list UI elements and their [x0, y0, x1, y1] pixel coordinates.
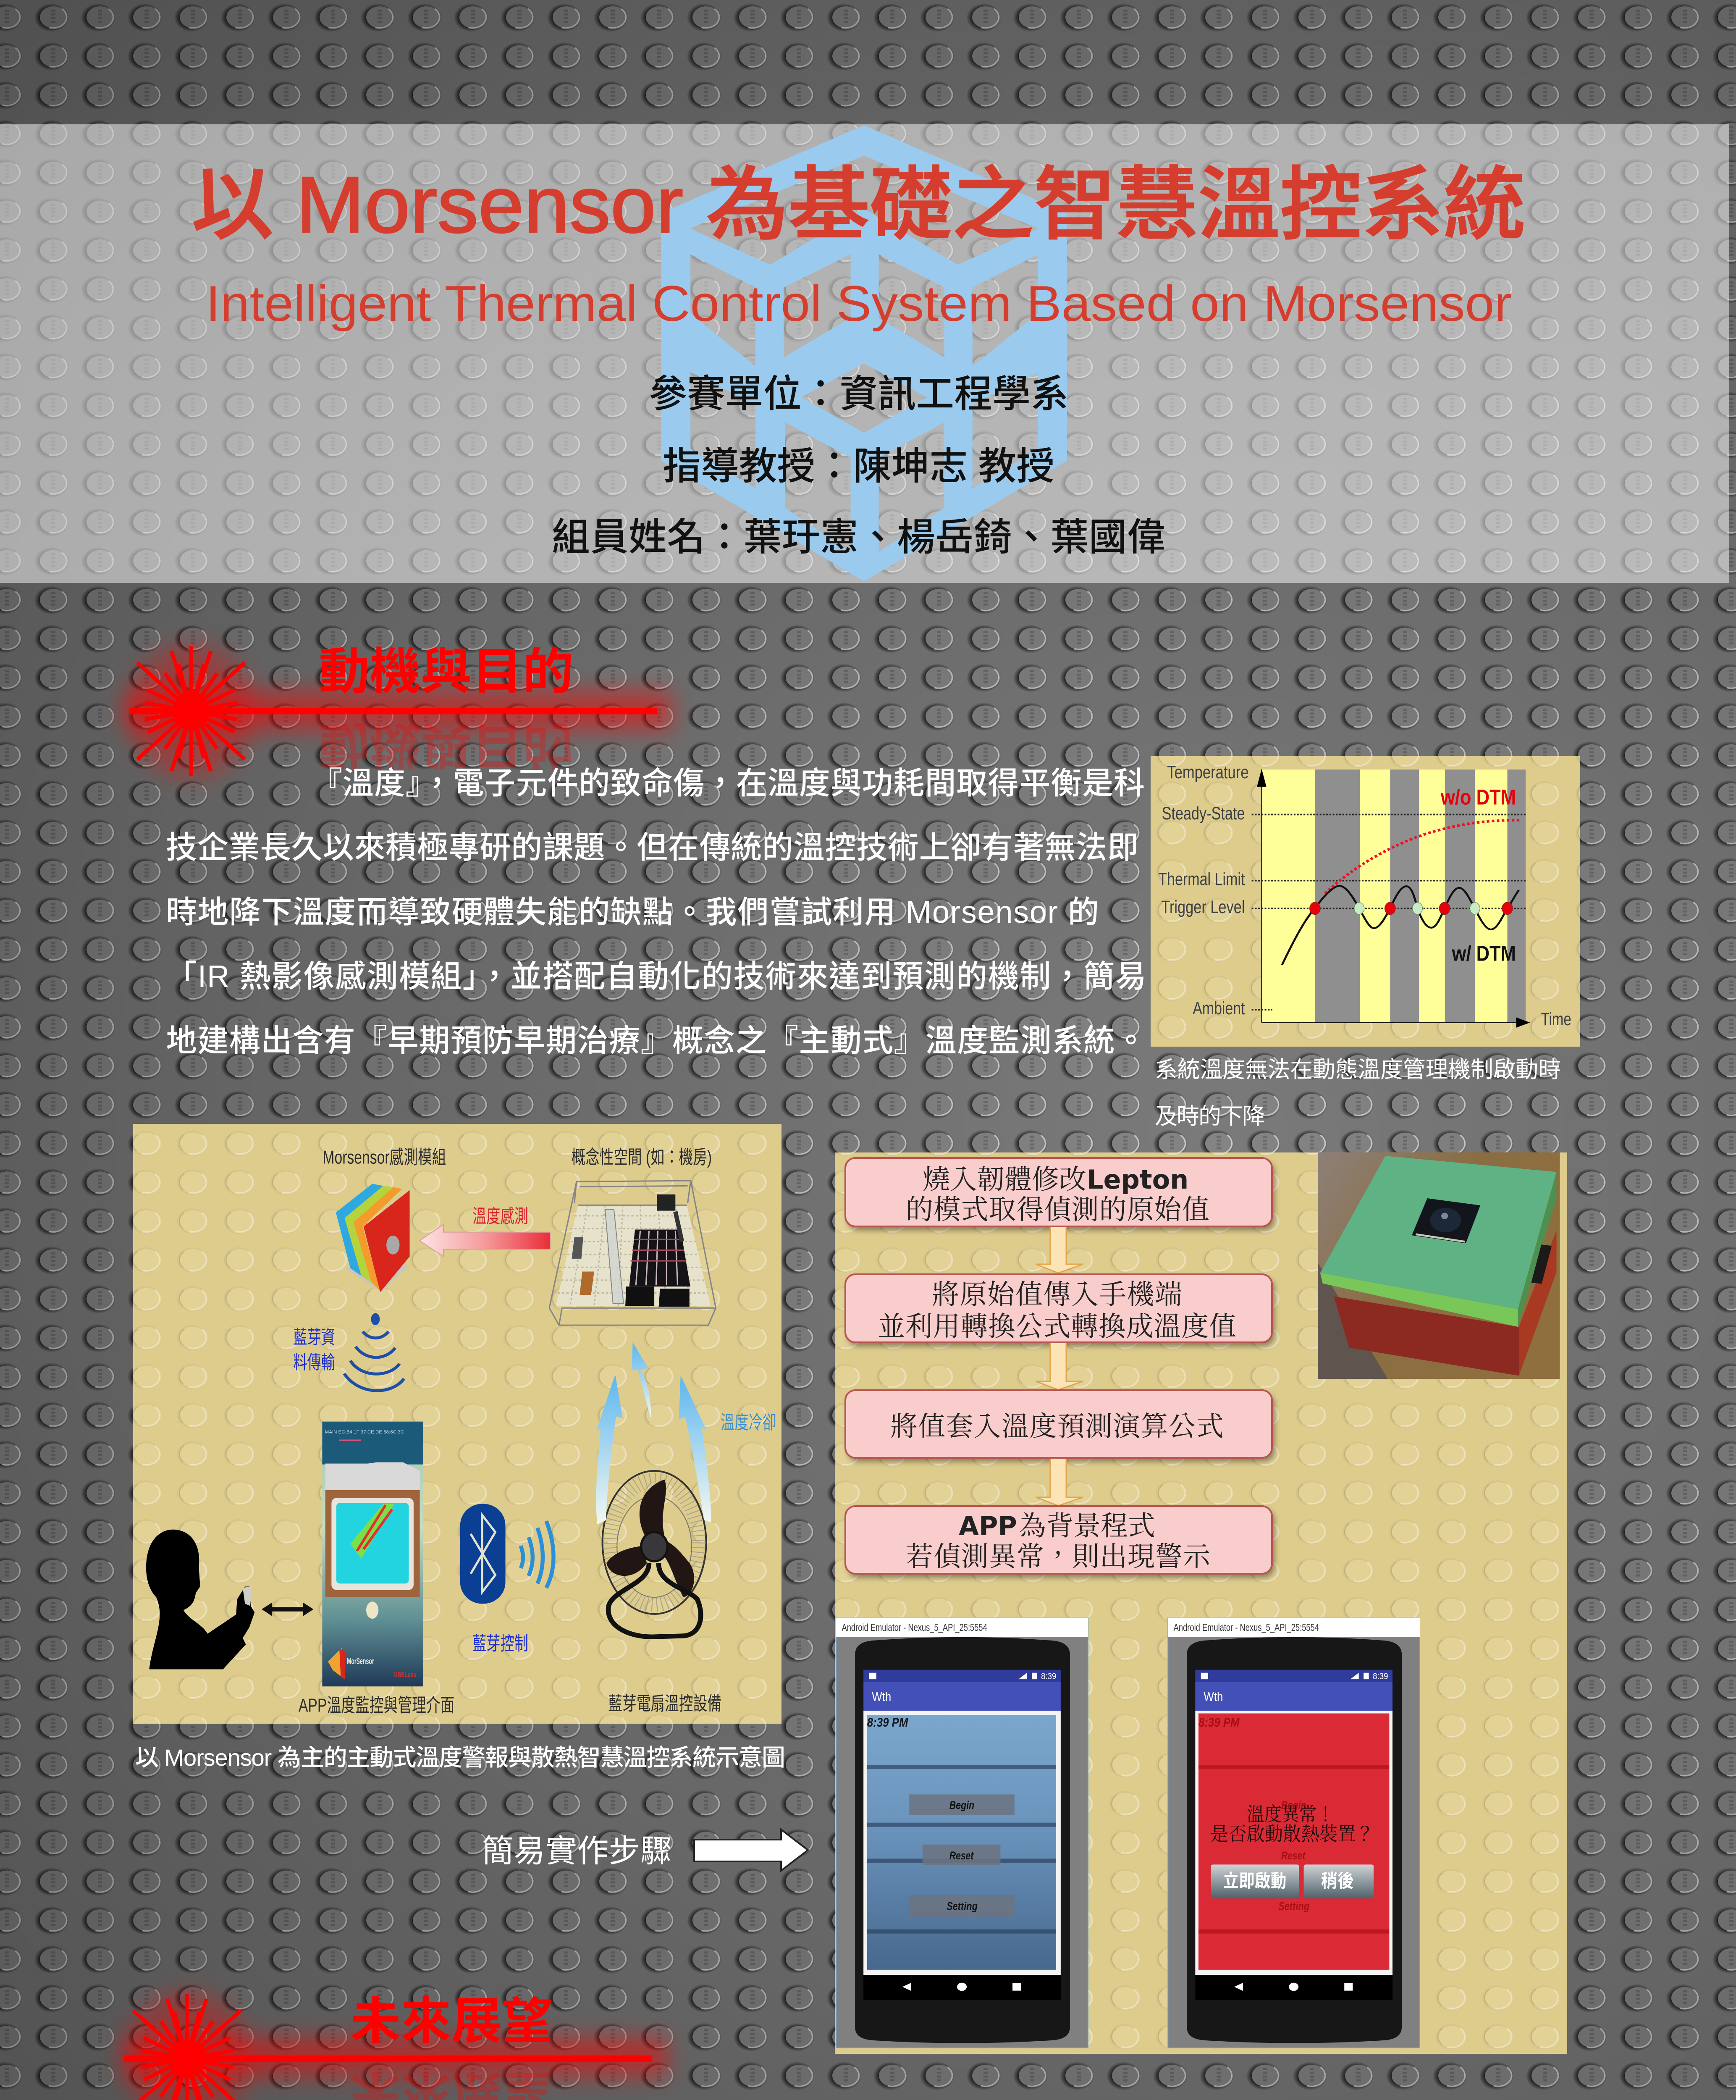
subtitle: Intelligent Thermal Control System Based on Morsensor: [206, 276, 1512, 332]
panel: system concept diagram: 概念性空間 (如：機房): [571, 1147, 712, 1168]
flow arrows: [1036, 1226, 1083, 1506]
app screen: MAIN EC:B4:1F 37:CE:DE 58:6C:3C: [325, 1430, 404, 1435]
panel: DTM temperature chart: Trigger Level: [1161, 897, 1245, 917]
text: advisor: 指導教授：陳坤志 教授: [663, 445, 1054, 488]
photo: sensor box: [1318, 1152, 1560, 1379]
phone: normal state: 8:39 PM: [867, 1716, 908, 1730]
phone: alert state: Begin: [1281, 1799, 1306, 1811]
caption: diagram: 以 Morsensor 為主的主動式溫度警報與散熱智慧溫控系統示意圖: [135, 1744, 785, 1771]
flow step 3: [845, 1390, 1272, 1458]
app screen: MorSensor: [347, 1656, 374, 1666]
phone: alert state: 8:39 PM: [1198, 1716, 1240, 1730]
arrow: person to app: [262, 1602, 313, 1616]
text: department: 參賽單位：資訊工程學系: [649, 373, 1069, 415]
panel: DTM temperature chart: [1151, 756, 1580, 1047]
section header: future outlook: 未來展望: [350, 1994, 553, 2049]
text: team members: 組員姓名：葉玗憲、楊岳錡、葉國偉: [552, 516, 1165, 559]
flow step 4: APP: [959, 1511, 1017, 1541]
flow step 2: 並利用轉換公式轉換成溫度值: [878, 1312, 1236, 1342]
panel: DTM temperature chart: Temperature: [1167, 762, 1249, 782]
text block: motivation body: 地建構出含有『早期預防早期治療』概念之『主動式』溫度監測系統。: [166, 1023, 1146, 1058]
flow step 4: 若偵測異常，則出現警示: [906, 1542, 1211, 1572]
app screen: [322, 1422, 423, 1686]
panel: system concept diagram: 料傳輸: [293, 1352, 335, 1373]
icon: Morsensor cube logo: [661, 125, 1067, 581]
panel: DTM temperature chart: Thermal Limit: [1158, 869, 1245, 889]
arrow: temperature sensing: [420, 1224, 550, 1257]
text block: motivation body: 「IR 熱影像感測模組」，並搭配自動化的技術來達到預測的機制，簡易: [166, 959, 1146, 994]
panel: system concept diagram: 藍芽電扇溫控設備: [608, 1693, 721, 1714]
icon: bluetooth: [460, 1504, 553, 1604]
icon: fan: [603, 1471, 706, 1637]
panel: DTM temperature chart: Steady-State: [1162, 803, 1245, 823]
panel: DTM temperature chart: Time: [1541, 1009, 1571, 1029]
phone: alert state: [1168, 1618, 1420, 2048]
text block: motivation body: 技企業長久以來積極專研的課題。但在傳統的溫控技術上卻有著無法即: [166, 830, 1138, 865]
icon: Morsensor module: [336, 1184, 410, 1292]
phone: normal state: Setting: [947, 1900, 978, 1912]
section header: future outlook: [124, 1992, 668, 2100]
caption: chart: [1155, 1057, 1561, 1129]
panel: DTM temperature chart: w/o DTM: [1440, 785, 1516, 809]
text block: motivation body: 『溫度』，電子元件的致命傷，在溫度與功耗間取得平衡是科: [311, 766, 1145, 801]
phone: alert state: 是否啟動散熱裝置？: [1210, 1824, 1374, 1845]
flow step 1: Lepton: [1087, 1164, 1188, 1195]
title: 以 Morsensor 為基礎之智慧溫控系統: [191, 160, 1526, 249]
text block: motivation body: [166, 766, 1146, 1058]
phone: normal state: [836, 1618, 1088, 2048]
arrow: to steps panel: [694, 1830, 808, 1871]
section header: motivation and purpose: [126, 644, 672, 778]
text block: motivation body: 時地降下溫度而導致硬體失能的缺點。我們嘗試利用 Morsensor 的: [166, 895, 1099, 929]
phone: alert state: 立即啟動: [1223, 1871, 1286, 1891]
section header: motivation and purpose: 動機與目的: [319, 644, 574, 700]
phone: alert state: 8:39: [1373, 1672, 1388, 1681]
flow step 4: 為背景程式: [1019, 1511, 1155, 1541]
text: implementation steps: 簡易實作步驟: [482, 1833, 672, 1869]
caption: chart: 及時的下降: [1155, 1104, 1265, 1129]
phone: alert state: 溫度異常！: [1247, 1804, 1334, 1825]
flow step 4: [845, 1506, 1272, 1574]
phone: normal state: Reset: [949, 1849, 974, 1862]
icon: person with phone: [146, 1530, 254, 1669]
flow step 1: 燒入韌體修改: [923, 1165, 1086, 1195]
flow step shadows: [848, 1162, 1274, 1578]
flow step 1: 的模式取得偵測的原始值: [906, 1195, 1209, 1225]
flow step 2: [845, 1274, 1272, 1342]
panel: DTM temperature chart: w/ DTM: [1452, 941, 1516, 966]
phone: alert state: Android Emulator - Nexus_5_API_25:5554: [1174, 1622, 1319, 1633]
flow step 2: 將原始值傳入手機端: [932, 1280, 1182, 1310]
phone: normal state: Wth: [872, 1689, 891, 1704]
phone: alert state: Setting: [1278, 1900, 1309, 1912]
phone: alert state: Wth: [1204, 1689, 1223, 1704]
arrows: cooling airflow: [596, 1342, 711, 1525]
section header: motivation and purpose: 動機與目的: [319, 717, 574, 772]
panel: system concept diagram: APP溫度監控與管理介面: [299, 1695, 454, 1716]
panel: implementation steps: [835, 1152, 1567, 2054]
caption: chart: 系統溫度無法在動態溫度管理機制啟動時: [1155, 1057, 1561, 1082]
phone: normal state: 8:39: [1041, 1672, 1056, 1681]
panel: system concept diagram: 溫度冷卻: [721, 1412, 776, 1433]
panel: system concept diagram: Morsensor感測模組: [323, 1147, 446, 1168]
flow step 1: [845, 1158, 1272, 1226]
panel: system concept diagram: [133, 1124, 781, 1724]
app screen: MBELabs: [393, 1671, 416, 1679]
phone: alert state: Reset: [1281, 1849, 1306, 1862]
flow step 3: 將值套入溫度預測演算公式: [890, 1412, 1224, 1442]
icon: server room: [549, 1181, 716, 1325]
title band: [0, 124, 1729, 583]
phone: alert state: 稍後: [1321, 1871, 1354, 1891]
emulators: [836, 1618, 1420, 2048]
panel: DTM temperature chart: Ambient: [1193, 998, 1245, 1018]
panel: system concept diagram: 藍芽資: [293, 1326, 335, 1348]
phone: normal state: Begin: [949, 1799, 974, 1811]
panel: system concept diagram: 藍芽控制: [472, 1633, 528, 1654]
panel: system concept diagram: 溫度感測: [472, 1206, 528, 1227]
icon: wireless signal: [344, 1313, 404, 1391]
phone: normal state: Android Emulator - Nexus_5_API_25:5554: [842, 1622, 987, 1633]
